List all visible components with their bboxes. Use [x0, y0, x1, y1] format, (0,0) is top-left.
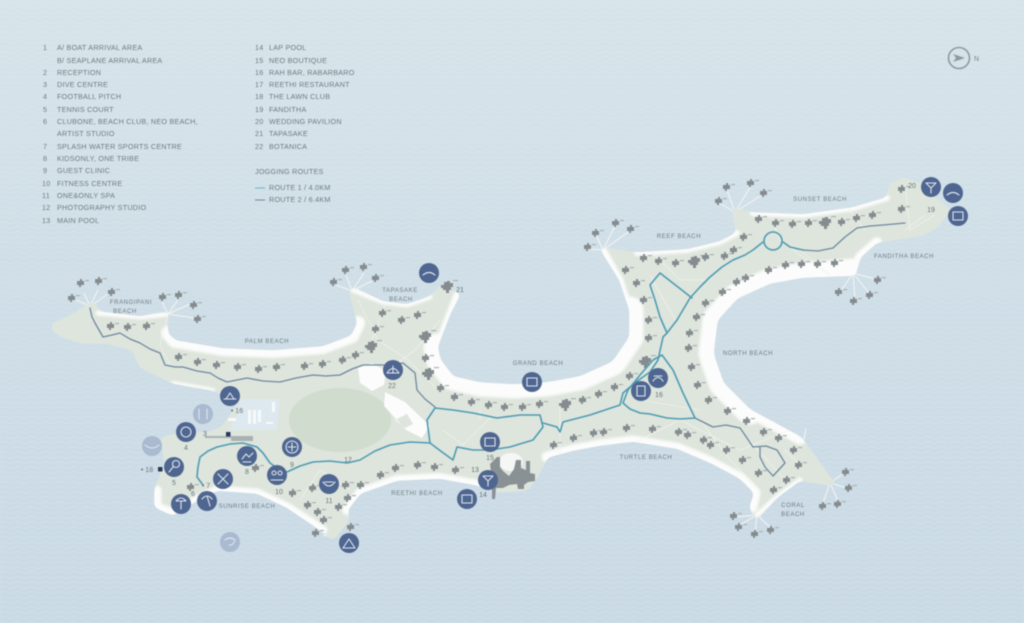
legend: facilities column 2: 15	[255, 56, 264, 65]
marker 20: wedding pavilion	[921, 177, 941, 197]
legend: facilities column 2: TAPASAKE	[269, 129, 308, 138]
legend: facilities column 1: SPLASH WATER SPORTS CENTRE	[57, 142, 182, 151]
pale marker: dive	[220, 532, 240, 552]
marker 10: fitness	[267, 465, 287, 485]
marker 5: tennis court	[164, 457, 184, 477]
compass	[948, 48, 979, 68]
marker 15: boutique	[480, 432, 500, 452]
map numbers: 11	[325, 498, 333, 505]
legend: facilities column 1: A/ BOAT ARRIVAL AREA	[57, 43, 142, 52]
legend: facilities column 2: WEDDING PAVILION	[269, 117, 342, 126]
marker 7: water sports	[213, 469, 233, 489]
legend: facilities column 1: FITNESS CENTRE	[57, 179, 122, 188]
map numbers: 22	[388, 383, 396, 390]
legend: facilities column 2: 14	[255, 43, 264, 52]
marker 13: main pool	[478, 470, 498, 490]
beach labels: GRAND BEACH	[513, 361, 563, 367]
map numbers: 13	[471, 467, 479, 474]
marker 18: lawn club	[948, 206, 968, 226]
map numbers: 12	[344, 457, 352, 464]
legend: facilities column 1: 6	[43, 117, 47, 126]
legend: facilities column 2: 21	[255, 129, 264, 138]
map numbers: 20	[908, 183, 916, 190]
legend: facilities column 2: 18	[255, 92, 264, 101]
pale marker: seaplane	[193, 404, 213, 424]
map numbers: 14	[479, 492, 487, 499]
beach labels: REEF BEACH	[657, 234, 701, 240]
legend: facilities column 1: FOOTBALL PITCH	[57, 92, 121, 101]
map numbers: 3	[203, 431, 207, 438]
beach labels: BEACH	[113, 309, 137, 315]
map numbers: • 7	[202, 483, 210, 490]
marker 9: guest clinic	[282, 437, 302, 457]
facility markers	[142, 177, 968, 553]
legend: facilities column 1: 2	[43, 68, 47, 77]
beach labels: TAPASAKE	[382, 288, 418, 294]
map numbers: • 16	[231, 408, 243, 415]
beach labels: CORAL	[781, 503, 805, 509]
legend: facilities column 1: RECEPTION	[57, 68, 101, 77]
beach labels: BEACH	[781, 512, 805, 518]
marker: south point	[339, 533, 359, 553]
marker 22: botanica	[383, 360, 403, 380]
beach labels: SUNSET BEACH	[793, 197, 847, 203]
beach labels	[110, 197, 934, 518]
map numbers	[141, 183, 935, 505]
marker 21: tapasake	[419, 263, 439, 283]
legend: facilities column 1: 10	[42, 179, 50, 188]
legend: facilities column 2: 17	[255, 80, 264, 89]
map numbers: • 18	[141, 467, 153, 474]
legend: facilities column 2	[255, 43, 355, 151]
legend: facilities column 2: REETHI RESTAURANT	[269, 80, 350, 89]
legend: facilities column 1: 4	[43, 92, 47, 101]
legend: facilities column 2: RAH BAR, RABARBARO	[269, 68, 355, 77]
beach labels: BEACH	[389, 297, 413, 303]
map numbers: 8	[245, 469, 249, 476]
map numbers: 15	[486, 455, 494, 462]
map numbers: 19	[927, 207, 935, 214]
island landmass	[52, 178, 950, 540]
jetties	[76, 186, 875, 537]
legend: facilities column 2: 20	[255, 117, 264, 126]
beach labels: TURTLE BEACH	[620, 455, 672, 461]
marker 16: rah bar	[220, 386, 240, 406]
botanica garden and lawn	[289, 363, 430, 452]
marker 16b: rabarbaro	[648, 368, 668, 388]
map numbers: 10	[275, 489, 283, 496]
legend: facilities column 2: 22	[255, 142, 264, 151]
legend: facilities column 1: 9	[43, 166, 47, 175]
beach labels: FANDITHA BEACH	[874, 254, 934, 260]
map numbers: 5	[172, 480, 176, 487]
lagoon and water villas at pitch	[205, 399, 280, 441]
marker 19: fanditha	[943, 183, 963, 203]
footpaths	[161, 214, 934, 491]
beaches: white sand	[98, 198, 887, 530]
legend: jogging routes: JOGGING ROUTES	[255, 167, 324, 176]
beach labels: FRANGIPANI	[110, 300, 152, 306]
marker 8: kids club	[237, 446, 257, 466]
legend: jogging routes: ROUTE 1 / 4.0KM	[269, 183, 331, 192]
map numbers: 9	[290, 462, 294, 469]
marker 17: reethi restaurant	[631, 381, 651, 401]
jogging route 1	[197, 232, 803, 485]
pale marker: boat	[142, 436, 162, 456]
legend: facilities column 1: KIDSONLY, ONE TRIBE	[57, 154, 139, 163]
map numbers: 21	[456, 287, 464, 294]
legend: facilities column 1: 11	[42, 191, 50, 200]
legend: facilities column 2: NEO BOUTIQUE	[269, 56, 327, 65]
legend: facilities column 2: THE LAWN CLUB	[269, 92, 330, 101]
beach labels: REETHI BEACH	[391, 491, 443, 497]
legend: facilities column 1: B/ SEAPLANE ARRIVAL AREA	[57, 56, 162, 65]
legend: facilities column 1: ARTIST STUDIO	[57, 129, 115, 138]
legend: facilities column 1	[42, 43, 198, 225]
legend: facilities column 1: 13	[42, 216, 50, 225]
legend: jogging routes: ROUTE 2 / 6.4KM	[269, 195, 331, 204]
legend: facilities column 1: TENNIS COURT	[57, 105, 114, 114]
legend: facilities column 1: CLUBONE, BEACH CLUB, NEO BEACH,	[57, 117, 198, 126]
marker: grand beach	[522, 372, 542, 392]
legend: facilities column 1: 5	[43, 105, 47, 114]
map numbers: 6	[191, 491, 195, 498]
legend: facilities column 2: 16	[255, 68, 264, 77]
legend: facilities column 2: LAP POOL	[269, 43, 306, 52]
marker 6: beach club	[197, 491, 217, 511]
legend: facilities column 2: FANDITHA	[269, 105, 307, 114]
villas	[68, 179, 910, 538]
legend: facilities column 1: 7	[43, 142, 47, 151]
legend: facilities column 1: 1	[43, 43, 47, 52]
legend: facilities column 1: 8	[43, 154, 47, 163]
legend: facilities column 1: ONE&ONLY SPA	[57, 191, 115, 200]
marker 14: lap pool	[457, 489, 477, 509]
legend: facilities column 2: 19	[255, 105, 264, 114]
legend: facilities column 1: 3	[43, 80, 47, 89]
legend: facilities column 1: DIVE CENTRE	[57, 80, 108, 89]
jogging route 2	[90, 223, 905, 476]
legend: facilities column 1: PHOTOGRAPHY STUDIO	[57, 203, 146, 212]
map numbers: 4	[184, 445, 188, 452]
legend: facilities column 1: 12	[42, 203, 50, 212]
legend: facilities column 1: MAIN POOL	[57, 216, 99, 225]
legend: facilities column 2: BOTANICA	[269, 142, 307, 151]
beach labels: PALM BEACH	[245, 339, 289, 345]
beach labels: NORTH BEACH	[723, 351, 773, 357]
marker 11: spa	[319, 474, 339, 494]
compass: N	[974, 56, 979, 63]
marker: club	[171, 494, 191, 514]
marker 4: football pitch	[176, 422, 196, 442]
beach labels: SUNRISE BEACH	[219, 504, 275, 510]
map numbers: 16	[655, 392, 663, 399]
legend: jogging routes	[255, 167, 331, 204]
main pool complex buildings	[487, 453, 535, 499]
legend: facilities column 1: GUEST CLINIC	[57, 166, 110, 175]
